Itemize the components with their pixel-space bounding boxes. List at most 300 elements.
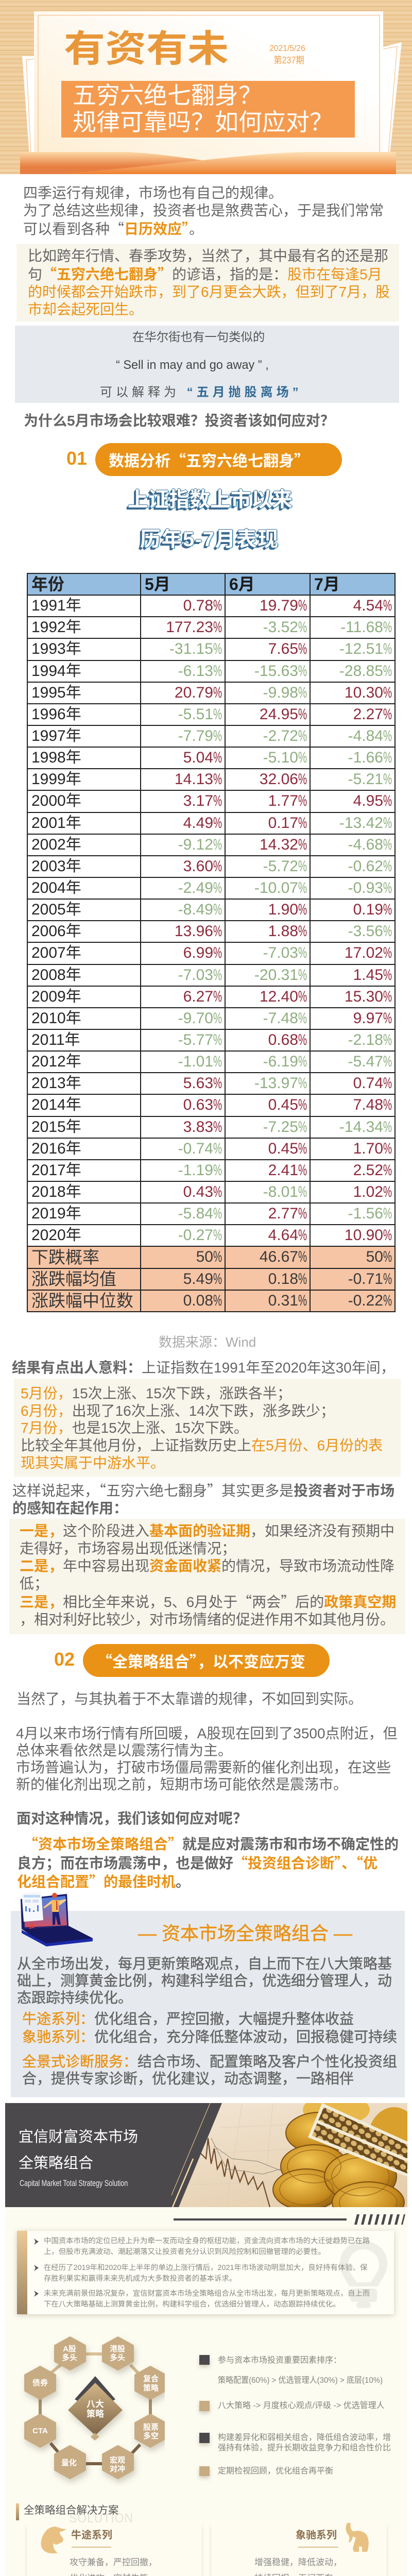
yearly rows: % xyxy=(383,706,392,723)
yearly rows: -7.48 xyxy=(263,1010,298,1027)
yearly rows: % xyxy=(383,749,392,766)
legend item 3 text xyxy=(218,2433,391,2453)
yearly rows: 10.30 xyxy=(345,684,383,701)
yearly rows: 0.68 xyxy=(268,1031,298,1048)
yearly rows: % xyxy=(298,640,307,657)
yearly rows: % xyxy=(213,988,222,1005)
yearly rows: % xyxy=(383,815,392,832)
yearly rows: -4.68 xyxy=(348,836,383,853)
yearly rows: % xyxy=(383,619,392,636)
heading: since listing: 上证指数上市以来 xyxy=(128,488,293,511)
panel: monthly statistics: 7月份，也是15次上涨、15次下跌。 xyxy=(21,1420,248,1436)
yearly rows: % xyxy=(298,1205,307,1222)
series list xyxy=(22,2011,397,2045)
text: market condition: 新的催化剂出现之前，短期市场可能依然是震荡市。 xyxy=(16,1776,348,1792)
yearly rows: % xyxy=(383,1075,392,1092)
yearly rows: % xyxy=(298,684,307,701)
summary rows: % xyxy=(383,1292,392,1309)
accent strip xyxy=(17,2231,27,2314)
legend item 2 marker xyxy=(199,2401,210,2411)
intro text: 为了总结这些规律，投资者也是煞费苦心，于是我们常常 xyxy=(23,202,384,218)
yearly rows: % xyxy=(383,640,392,657)
yearly rows: % xyxy=(383,1031,392,1048)
yearly rows: -15.63 xyxy=(254,663,298,680)
icon: elephant xyxy=(346,2523,370,2552)
yearly rows: 2002年 xyxy=(31,836,81,853)
yearly rows: 0.19 xyxy=(353,901,383,918)
diagram: eight strategies hexagon ring: 多头 xyxy=(110,2353,125,2362)
panel description: 从全市场出发，每月更新策略观点，自上而下在八大策略基 xyxy=(17,1956,392,1972)
table header: 7月 xyxy=(314,575,340,594)
yearly rows: -2.49 xyxy=(178,879,213,896)
text: strategy recommendation: 化组合配置”的最佳时机。 xyxy=(17,1871,190,1891)
heading text: 全策略组合解决方案 xyxy=(24,2504,118,2516)
table header xyxy=(28,574,394,595)
yearly rows: % xyxy=(383,901,392,918)
icon: light bulb watermark xyxy=(340,2241,387,2308)
title: 有资有未 xyxy=(64,28,229,70)
yearly rows: 1996年 xyxy=(31,706,81,723)
bullet text 1: 上，但股市充满波动、潮起潮落又让投资者充分认识到风险控制和回撤管理的必要性。 xyxy=(44,2248,325,2256)
bullet text 1 xyxy=(44,2236,370,2258)
diagram: eight strategies hexagon ring: 多空 xyxy=(143,2431,159,2441)
yearly rows: 24.95 xyxy=(260,706,298,723)
perception lead-in: 的感知在起作用： xyxy=(12,1500,128,1516)
yearly rows: -7.25 xyxy=(263,1118,298,1136)
diagram: eight strategies hexagon ring: 对冲 xyxy=(110,2464,125,2473)
yearly rows: 0.45 xyxy=(268,1096,298,1113)
diagram: eight strategies hexagon ring: 多头 xyxy=(62,2353,77,2362)
yearly rows: 2.41 xyxy=(268,1162,298,1179)
yearly rows: -9.12 xyxy=(178,836,213,853)
summary rows: -0.22 xyxy=(348,1292,383,1309)
yearly rows: 3.83 xyxy=(183,1118,213,1136)
summary rows: % xyxy=(298,1270,307,1287)
yearly rows: -5.21 xyxy=(348,771,383,788)
yearly rows: % xyxy=(383,988,392,1005)
yearly rows: % xyxy=(298,749,307,766)
yearly rows: -0.74 xyxy=(178,1140,213,1157)
yearly rows: 15.30 xyxy=(345,988,383,1005)
yearly rows: 2005年 xyxy=(31,901,81,918)
yearly rows: % xyxy=(383,923,392,940)
banner title xyxy=(19,2129,138,2172)
yearly rows: -2.72 xyxy=(263,727,298,744)
yearly rows: % xyxy=(213,727,222,744)
text: market condition: 市场普遍认为，打破市场僵局需要新的催化剂出现，在这些 xyxy=(16,1759,391,1775)
summary rows: 0.08 xyxy=(183,1292,213,1309)
diagram: eight strategies hexagon ring xyxy=(15,2331,165,2486)
summary rows: 0.18 xyxy=(268,1270,298,1287)
text: market condition: 总体来看依然是以震荡行情为主。 xyxy=(16,1742,232,1758)
yearly rows: 2.52 xyxy=(353,1162,383,1179)
yearly rows: 4.49 xyxy=(183,815,213,832)
yearly rows: % xyxy=(298,1053,307,1070)
yearly rows: % xyxy=(383,684,392,701)
yearly rows: % xyxy=(298,1140,307,1157)
bullet text 3: 下在八大策略基础上测算黄金比例，构建科学组合，优选细分管理人，动态跟踪持续优化。 xyxy=(44,2300,340,2309)
summary rows: 涨跌幅中位数 xyxy=(31,1291,133,1310)
yearly rows: 2017年 xyxy=(31,1162,81,1179)
summary rows: 50 xyxy=(196,1248,213,1265)
panel: Wall Street saying: 可以解释为 “五月抛股离场” xyxy=(100,385,302,399)
text: market condition: 4月以来市场行情有所回暖，A股现在回到了3500点附近，但 xyxy=(16,1725,398,1741)
yearly rows: -4.84 xyxy=(348,727,383,744)
yearly rows: 1998年 xyxy=(31,749,81,766)
diagnosis service: 合，提供专家诊断，优化建议，动态调整，一路相伴 xyxy=(22,2071,354,2087)
yearly rows: % xyxy=(213,1031,222,1048)
yearly rows: % xyxy=(298,663,307,680)
yearly rows: % xyxy=(298,1096,307,1113)
yearly rows: -0.27 xyxy=(178,1227,213,1244)
yearly rows: -13.42 xyxy=(339,815,383,832)
heading: May to July performance: 历年5-7月表现 xyxy=(140,528,279,551)
yearly rows: % xyxy=(298,619,307,636)
yearly rows: 19.79 xyxy=(260,597,298,614)
yearly rows: 10.90 xyxy=(345,1227,383,1244)
yearly rows: -3.52 xyxy=(263,619,298,636)
yearly rows: 1995年 xyxy=(31,684,81,701)
yearly rows: 2.27 xyxy=(353,706,383,723)
yearly rows: % xyxy=(383,836,392,853)
yearly rows: 0.17 xyxy=(268,815,298,832)
yearly rows: % xyxy=(298,1162,307,1179)
panel: calendar effect explanation xyxy=(16,244,399,321)
yearly rows: -5.10 xyxy=(263,749,298,766)
yearly rows: 5.63 xyxy=(183,1075,213,1092)
panel: three reasons xyxy=(9,1519,405,1634)
yearly rows: % xyxy=(383,944,392,961)
yearly rows: % xyxy=(383,792,392,809)
yearly rows: 2015年 xyxy=(31,1118,81,1136)
yearly rows: -7.03 xyxy=(178,967,213,984)
yearly rows: % xyxy=(298,771,307,788)
yearly rows: % xyxy=(213,1075,222,1092)
yearly rows: 2.77 xyxy=(268,1205,298,1222)
legend: strategy notes xyxy=(199,2352,405,2481)
yearly rows: % xyxy=(213,1183,222,1200)
yearly rows: 3.60 xyxy=(183,858,213,875)
panel: calendar effect explanation: 比如跨年行情、春季攻势，当然了，其中最有名的还是那 xyxy=(28,248,388,264)
section pill 02: “全策略组合”，以不变应万变 xyxy=(97,1649,305,1672)
summary rows: 46.67 xyxy=(260,1248,298,1265)
summary rows: 50 xyxy=(366,1248,383,1265)
yearly rows: 1992年 xyxy=(31,619,81,636)
summary rows: % xyxy=(213,1248,222,1265)
yearly rows: % xyxy=(213,967,222,984)
yearly rows: % xyxy=(298,727,307,744)
diagram: eight strategies hexagon ring: 八大 xyxy=(87,2399,104,2409)
yearly rows: % xyxy=(298,858,307,875)
yearly rows: -1.56 xyxy=(348,1205,383,1222)
intro text: 四季运行有规律，市场也有自己的规律。 xyxy=(23,185,283,201)
banner: product header with coins and abacus photo xyxy=(5,2103,407,2207)
yearly rows: % xyxy=(383,1205,392,1222)
yearly rows: 2012年 xyxy=(31,1053,81,1070)
summary rows: 5.49 xyxy=(183,1270,213,1287)
yearly rows: % xyxy=(213,1162,222,1179)
table header: 5月 xyxy=(145,575,170,594)
legend item 2 text: 八大策略 -> 月度核心观点/评级 -> 优选管理人 xyxy=(218,2401,385,2410)
yearly rows: 1991年 xyxy=(31,597,81,614)
yearly rows: -14.34 xyxy=(339,1118,383,1136)
panel: monthly statistics: 比较全年其他月份，上证指数历史上在5月份、6月份的表 xyxy=(21,1437,383,1453)
banner title: 宜信财富资本市场 xyxy=(19,2129,138,2145)
panel heading: — 资本市场全策略组合 — xyxy=(138,1923,352,1944)
yearly rows: -11.68 xyxy=(340,619,383,636)
card text xyxy=(254,2554,342,2576)
yearly rows: -5.72 xyxy=(263,858,298,875)
yearly rows: -20.31 xyxy=(254,967,298,984)
yearly rows: % xyxy=(213,771,222,788)
yearly rows: 0.63 xyxy=(183,1096,213,1113)
text: market condition xyxy=(16,1725,398,1792)
card title: 象驰系列 xyxy=(296,2530,337,2541)
yearly rows: % xyxy=(298,1075,307,1092)
yearly rows: -5.84 xyxy=(178,1205,213,1222)
yearly rows: % xyxy=(383,858,392,875)
text: strategy recommendation: “资本市场全策略组合”就是应对震荡市和市场不确定性的 xyxy=(24,1833,399,1854)
diagram: eight strategies hexagon ring: CTA xyxy=(32,2427,48,2435)
legend item 1 detail: 策略配置(60%) > 优选管理人(30%) > 底层(10%) xyxy=(218,2376,383,2385)
summary rows xyxy=(28,1247,394,1311)
yearly rows: % xyxy=(383,1053,392,1070)
yearly rows: 2019年 xyxy=(31,1205,81,1222)
yearly rows: 2016年 xyxy=(31,1140,81,1157)
yearly rows: % xyxy=(213,640,222,657)
yearly rows: 0.43 xyxy=(183,1183,213,1200)
yearly rows: 14.13 xyxy=(175,771,213,788)
panel: three reasons: ，相对利好比较少，对市场情绪的促进作用不如其他月份。 xyxy=(20,1612,394,1628)
yearly rows: 2001年 xyxy=(31,815,81,832)
text: strategy recommendation: 良方；而在市场震荡中，也是做好“投资组合诊断”、“优 xyxy=(17,1852,377,1872)
perception lead-in xyxy=(12,1480,394,1516)
yearly rows: 17.02 xyxy=(345,944,383,961)
bullet text 3 xyxy=(44,2289,370,2310)
issue number: 第237期 xyxy=(273,55,304,65)
yearly rows: % xyxy=(213,1096,222,1113)
legend item 4 text: 定期检视回顾，优化组合再平衡 xyxy=(218,2467,333,2476)
yearly rows: 2004年 xyxy=(31,879,81,896)
card text: 攻守兼备，严控回撤， xyxy=(70,2557,157,2567)
yearly rows: -2.18 xyxy=(348,1031,383,1048)
yearly rows: 12.40 xyxy=(260,988,298,1005)
panel: monthly statistics: 6月份，出现了16次上涨、14次下跌，涨多跌少； xyxy=(21,1403,335,1419)
yearly rows: % xyxy=(213,792,222,809)
yearly rows: -13.97 xyxy=(254,1075,298,1092)
summary rows: 涨跌幅均值 xyxy=(31,1269,116,1289)
yearly rows: % xyxy=(298,1183,307,1200)
yearly rows: 1994年 xyxy=(31,663,81,680)
yearly rows: 1993年 xyxy=(31,640,81,657)
yearly rows: % xyxy=(213,836,222,853)
yearly rows: 1.77 xyxy=(268,792,298,809)
panel: Wall Street saying: “ Sell in may and go away ” , xyxy=(116,358,269,372)
yearly rows: % xyxy=(383,1162,392,1179)
yearly rows: % xyxy=(383,967,392,984)
diagram: eight strategies hexagon ring: 债券 xyxy=(32,2378,48,2387)
yearly rows: % xyxy=(383,727,392,744)
yearly rows: 0.45 xyxy=(268,1140,298,1157)
icon: bull xyxy=(40,2527,66,2553)
panel: three reasons: 三是，相比全年来说，5、6月处于“两会”后的政策真空期 xyxy=(20,1591,396,1612)
panel: market background bullets xyxy=(17,2231,394,2314)
panel: capital market total strategy xyxy=(11,1911,405,2097)
banner: headline question: 规律可靠吗？如何应对？ xyxy=(73,109,333,135)
yearly rows: % xyxy=(383,1227,392,1244)
table header: 年份 xyxy=(31,575,64,594)
yearly rows: -9.98 xyxy=(263,684,298,701)
yearly rows: -12.51 xyxy=(339,640,383,657)
decoration: dark bar with slashes xyxy=(174,2214,405,2225)
yearly rows: % xyxy=(213,944,222,961)
yearly rows: 2000年 xyxy=(31,792,81,809)
panel: calendar effect explanation: 市却会起死回生。 xyxy=(28,301,143,317)
yearly rows: -10.07 xyxy=(254,879,298,896)
panel: Wall Street saying xyxy=(15,326,399,403)
yearly rows: 7.48 xyxy=(353,1096,383,1113)
series list: 象驰系列：优化组合，充分降低整体波动，回报稳健可持续 xyxy=(22,2029,397,2045)
title underline xyxy=(72,2547,111,2548)
summary rows: 0.31 xyxy=(268,1292,298,1309)
yearly rows: % xyxy=(298,792,307,809)
text: back to reality: 当然了，与其执着于不太靠谱的规律，不如回到实际。 xyxy=(16,1691,363,1707)
card: elephant series xyxy=(211,2523,387,2576)
banner: headline question: 五穷六绝七翻身？ xyxy=(73,82,262,109)
panel: three reasons: 走得好，市场容易出现低迷情况； xyxy=(20,1540,236,1556)
yearly rows: % xyxy=(383,663,392,680)
panel: monthly statistics: 5月份，15次上涨、15次下跌，涨跌各半； xyxy=(21,1385,291,1401)
summary rows: 下跌概率 xyxy=(31,1248,99,1267)
yearly rows: -1.19 xyxy=(178,1162,213,1179)
yearly rows: % xyxy=(213,1010,222,1027)
section pill 01: 数据分析“五穷六绝七翻身” xyxy=(109,448,310,471)
yearly rows: % xyxy=(383,597,392,614)
section number 01: 01 xyxy=(66,448,87,469)
yearly rows: 32.06 xyxy=(260,771,298,788)
summary rows: % xyxy=(383,1248,392,1265)
legend item 1 marker xyxy=(199,2355,210,2365)
yearly rows: 1.02 xyxy=(353,1183,383,1200)
yearly rows: % xyxy=(298,967,307,984)
summary rows: % xyxy=(383,1270,392,1287)
yearly rows: % xyxy=(298,706,307,723)
yearly rows: % xyxy=(383,1183,392,1200)
yearly rows: % xyxy=(298,1118,307,1136)
yearly rows: 2008年 xyxy=(31,967,81,984)
diagram: eight strategies hexagon ring: 量化 xyxy=(61,2458,77,2467)
yearly rows: % xyxy=(213,663,222,680)
bullet marks xyxy=(33,2238,40,2303)
yearly rows: % xyxy=(298,1010,307,1027)
card: bull series xyxy=(27,2523,202,2576)
diagram: eight strategies hexagon ring: 宏观 xyxy=(110,2455,125,2465)
yearly rows: % xyxy=(298,815,307,832)
yearly rows: % xyxy=(298,923,307,940)
card text xyxy=(70,2554,157,2576)
yearly rows: 177.23 xyxy=(166,619,213,636)
watermark word: SOLUTION xyxy=(69,2511,133,2526)
yearly rows: 2006年 xyxy=(31,923,81,940)
banner: headline question xyxy=(61,81,355,138)
yearly rows: % xyxy=(383,1096,392,1113)
yearly rows: 2018年 xyxy=(31,1183,81,1200)
panel: Wall Street saying: 在华尔街也有一句类似的 xyxy=(132,330,265,344)
yearly rows: % xyxy=(213,1140,222,1157)
panel: three reasons: 二是，年中容易出现资金面收紧的情况，导致市场流动性降 xyxy=(20,1558,394,1574)
yearly rows xyxy=(31,597,392,1244)
yearly rows: 6.27 xyxy=(183,988,213,1005)
yearly rows: 1.70 xyxy=(353,1140,383,1157)
panel: three reasons: 低； xyxy=(20,1575,48,1591)
panel description: 础上，测算黄金比例，构建科学组合，优选细分管理人，动 xyxy=(17,1973,392,1989)
card text: 增强稳健，降低波动， xyxy=(254,2557,342,2567)
yearly rows: % xyxy=(298,1227,307,1244)
panel: monthly statistics xyxy=(14,1379,401,1477)
yearly rows: 14.32 xyxy=(260,836,298,853)
yearly rows: % xyxy=(298,944,307,961)
table header: 6月 xyxy=(229,575,255,594)
yearly rows: 4.54 xyxy=(353,597,383,614)
yearly rows: % xyxy=(213,597,222,614)
hero header: wood background, paper and envelope xyxy=(0,0,412,174)
yearly rows: % xyxy=(213,879,222,896)
question heading: 为什么5月市场会比较艰难？投资者该如何应对？ xyxy=(24,413,335,429)
text: strategy recommendation xyxy=(17,1833,399,1891)
yearly rows: % xyxy=(213,1118,222,1136)
yearly rows: -7.79 xyxy=(178,727,213,744)
yearly rows: % xyxy=(213,901,222,918)
yearly rows: % xyxy=(213,858,222,875)
text: how to respond heading: 面对这种情况，我们该如何应对呢？ xyxy=(16,1810,247,1826)
yearly rows: -3.56 xyxy=(348,923,383,940)
yearly rows: -9.70 xyxy=(178,1010,213,1027)
series list: 牛途系列：优化组合，严控回撤，大幅提升整体收益 xyxy=(22,2011,354,2027)
summary rows: % xyxy=(298,1292,307,1309)
bullet text 2 xyxy=(44,2263,368,2284)
diagnosis service xyxy=(22,2054,397,2087)
panel: monthly statistics: 现其实属于中游水平。 xyxy=(21,1455,165,1471)
yearly rows: 2013年 xyxy=(31,1075,81,1092)
yearly rows: % xyxy=(213,1053,222,1070)
bullet text 3: 未来充满前景但路况复杂，宜信财富资本市场全策略组合从全市场出发，每月更新策略观点，自上而 xyxy=(44,2290,370,2298)
yearly rows: -7.03 xyxy=(263,944,298,961)
issue date and number: 2021/5/26 xyxy=(269,43,305,53)
yearly rows: 1.90 xyxy=(268,901,298,918)
perception lead-in: 这样说起来，“五穷六绝七翻身”其实更多是投资者对于市场 xyxy=(12,1480,394,1500)
yearly rows: 1.88 xyxy=(268,923,298,940)
section number 02: 02 xyxy=(54,1649,75,1670)
section pill 01 xyxy=(95,443,342,476)
banner English subtitle: Capital Market Total Strategy Solution xyxy=(20,2178,128,2188)
yearly rows: -6.13 xyxy=(178,663,213,680)
yearly rows: 2020年 xyxy=(31,1227,81,1244)
intro text: 可以看到各种“日历效应”。 xyxy=(23,218,203,239)
yearly rows: -1.66 xyxy=(348,749,383,766)
yearly rows: -5.51 xyxy=(178,706,213,723)
yearly rows: % xyxy=(298,1031,307,1048)
yearly rows: 2010年 xyxy=(31,1010,81,1027)
legend item 3 text: 构建差异化和弱相关组合，降低组合波动率，增 xyxy=(218,2433,391,2442)
bullet text 1: 中国资本市场的定位已经上升为牵一发而动全身的枢纽功能，资金流向资本市场的大迁徙趋势已在路 xyxy=(44,2237,370,2245)
yearly rows: % xyxy=(383,1118,392,1136)
yearly rows: % xyxy=(298,988,307,1005)
yearly rows: 2007年 xyxy=(31,944,81,961)
yearly rows: 9.97 xyxy=(353,1010,383,1027)
table: Shanghai Composite May to July returns xyxy=(27,573,396,1312)
panel: three reasons: 一是，这个阶段进入基本面的验证期，如果经济没有预期中 xyxy=(20,1523,394,1539)
yearly rows: 2003年 xyxy=(31,858,81,875)
